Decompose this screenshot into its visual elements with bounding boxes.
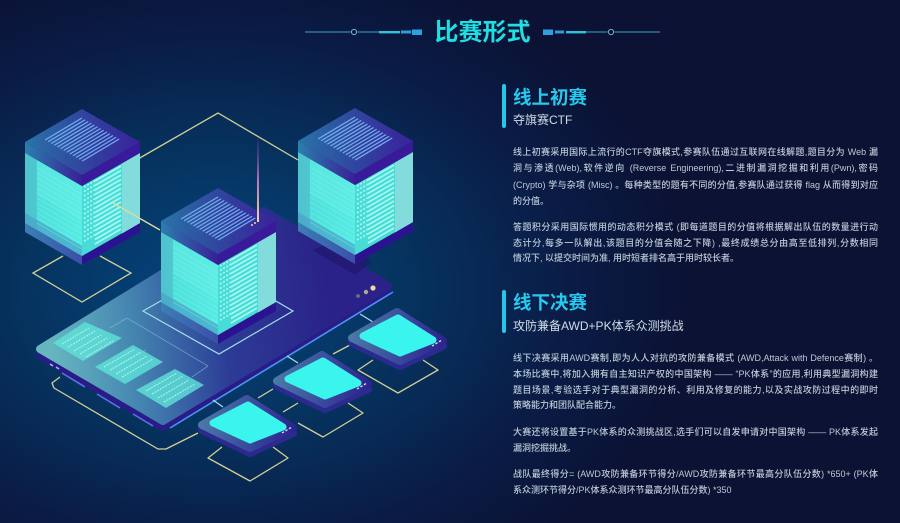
platform tablet [40,211,393,428]
paragraph: AWD format [513,353,878,410]
connector from left cube to centre cube [113,203,160,230]
header ornament left [305,29,422,35]
panel: offline finals [502,290,878,495]
platform data panel one [53,322,122,361]
paragraph: format: (Crypto) 学与杂项 (Misc) 。每种类型的题有不同的分值,参赛队通过获得 flag 从而得到对应 [513,180,878,190]
chip two [277,355,368,409]
panel: online preliminaries [502,84,878,263]
paragraph: score formula: 系众测环节得分/PK体系众测环节最高分队伍分数) *350 [513,485,732,495]
paragraph: scoring: 态计分,每多一队解出,该题目的分值会随之下降) ,最终成绩总分由高至低排列,分数相同 [513,238,878,248]
paragraph: scoring: 答题积分采用国际惯用的动态积分模式 (即每道题目的分值将根据解出队伍的数量进行动 [513,222,878,232]
connectors to chips [52,345,438,481]
accent bar [502,84,506,128]
circuit lines between servers [33,113,298,302]
server cube left [25,109,140,265]
server shadow on platform [312,240,372,275]
header ornament right [543,29,660,35]
paragraph: scoring: 情况下, 以提交时间为准, 用时短者排名高于用时较长者。 [513,253,739,263]
paragraph: score formula [513,469,878,495]
paragraph: format: 线上初赛采用国际上流行的CTF夺旗模式,参赛队伍通过互联网在线解题,题目分为 Web 漏 [513,147,878,157]
paragraph: crowd testing: 大赛还将设置基于PK体系的众测挑战区,选手们可以自发申请对中国架构 —— PK体系发起 [513,427,878,437]
paragraph: crowd testing [513,427,878,453]
paragraph: AWD format: 线下决赛采用AWD赛制,即为人人对抗的攻防兼备模式 (AWD,Attack with Defence赛制) 。 [513,353,878,363]
heading: 线上初赛 [513,87,587,108]
paragraph: AWD format: 策略能力和团队配合能力。 [513,400,621,410]
paragraph: AWD format: 本场比赛中,将加入拥有自主知识产权的中国架构 —— “PK体系”的应用,利用典型漏洞构建 [513,369,878,379]
signal beam [251,137,259,226]
paragraph: AWD format: 题目场景,考验选手对于典型漏洞的分析、利用及修复的能力,以及实战攻防过程中的即时 [513,385,878,395]
title: 比赛形式 [434,19,530,46]
platform data panel two [95,345,163,384]
paragraph: format: 洞与渗透(Web),软件逆向 (Reverse Engineering),二进制漏洞挖掘和利用(Pwn),密码 [513,163,878,173]
paragraph: scoring [513,222,878,263]
paragraph: format: 的分值。 [513,196,549,206]
platform to chip links [213,314,373,407]
paragraph: format [513,147,878,206]
server cube centre [161,188,276,344]
paragraph: crowd testing: 漏洞挖掘挑战。 [513,443,576,453]
chip three [352,312,443,366]
server square outline on platform [143,268,293,354]
chip one [202,399,293,453]
platform status dots [356,285,376,298]
subheading: 攻防兼备AWD+PK体系众测挑战 [513,319,684,333]
paragraph: score formula: 战队最终得分= (AWD攻防兼备环节得分/AWD攻防兼备环节最高分队伍分数) *650+ (PK体 [513,469,878,479]
heading: 线下决赛 [513,292,587,313]
server cube right [298,108,413,264]
subheading: 夺旗赛CTF [513,113,572,127]
accent bar [502,290,506,333]
platform data panel three [136,369,204,408]
